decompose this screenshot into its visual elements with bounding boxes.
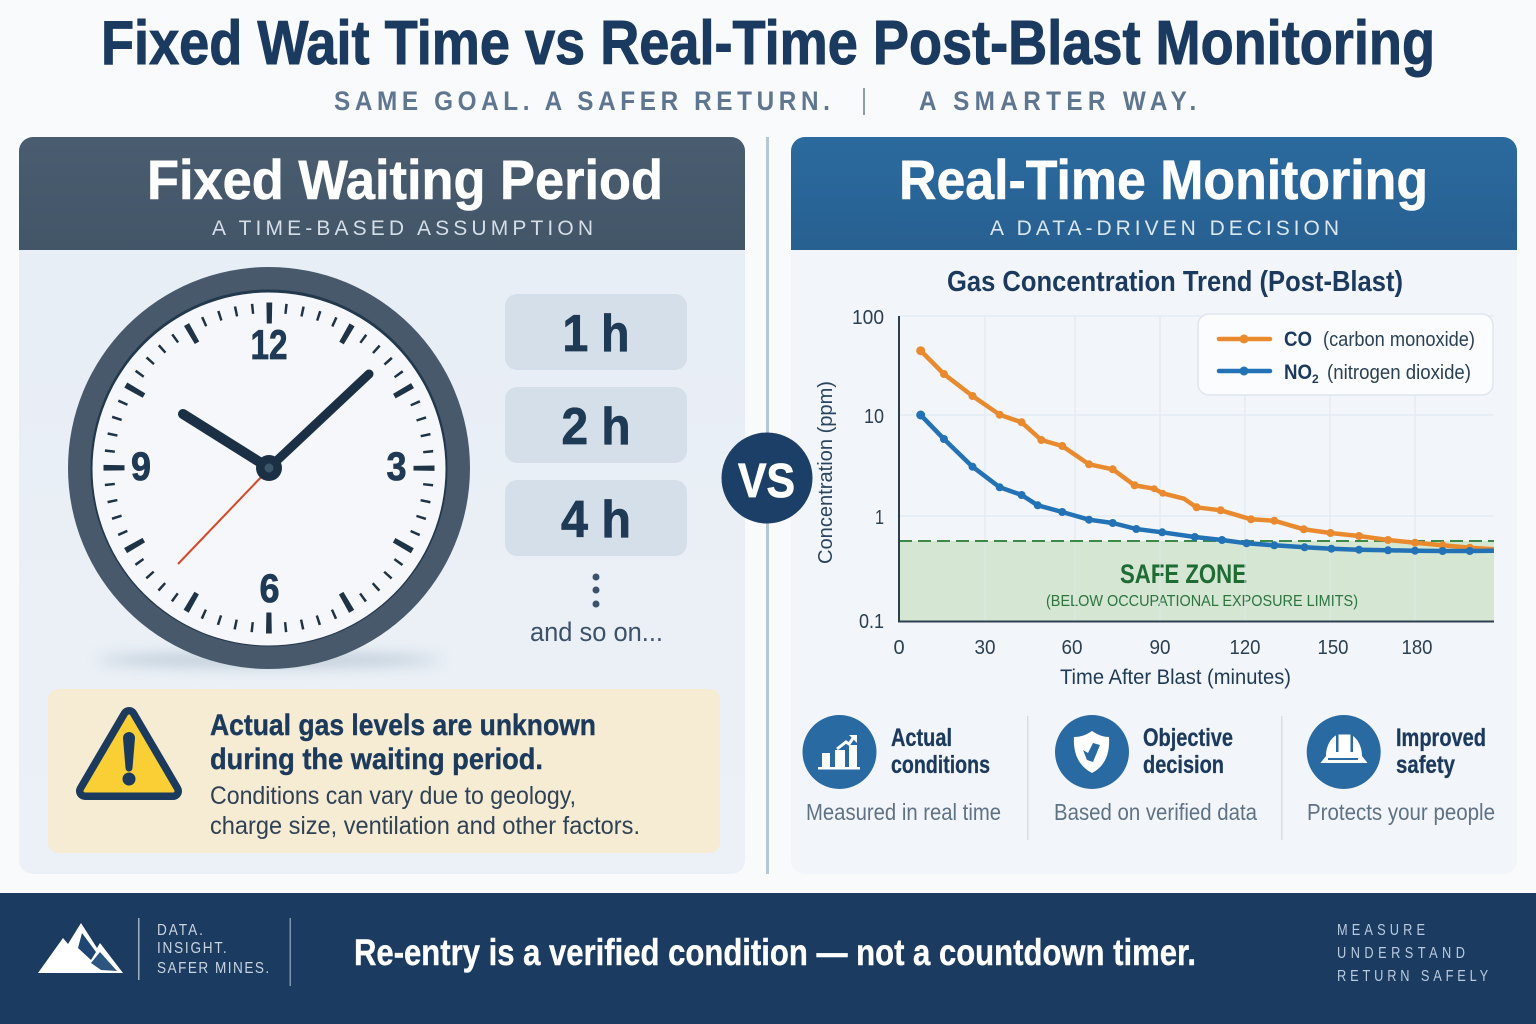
x axis labels: 150 <box>1318 637 1348 659</box>
subtitle <box>334 87 1196 116</box>
y axis labels: 10 <box>864 406 884 428</box>
series: NO2 <box>916 410 1494 555</box>
series: CO <box>916 346 1494 552</box>
footer banner <box>0 893 1536 1024</box>
benefit: objective decision <box>1054 715 1257 825</box>
axes <box>899 316 1494 622</box>
icon: warning triangle <box>85 716 173 791</box>
time option: 1 h: 1 h <box>562 305 630 363</box>
panel header: real-time monitoring: Real-Time Monitoring <box>899 148 1428 211</box>
continuation dots and caption: and so on... <box>530 617 663 647</box>
legend <box>1198 314 1493 395</box>
legend: (nitrogen dioxide) <box>1327 362 1471 384</box>
footer steps: MEASURE <box>1337 922 1425 939</box>
time option: 4 h: 4 h <box>561 491 631 549</box>
icon: clock <box>68 267 470 669</box>
divider between panels <box>766 137 769 874</box>
x axis labels: 180 <box>1402 637 1432 659</box>
safe zone: SAFE ZONE <box>1120 559 1247 589</box>
benefit: improved safety <box>1307 715 1495 825</box>
panel header: fixed waiting period <box>19 137 745 250</box>
panel header: fixed waiting period: A TIME-BASED ASSUMPTION <box>212 217 593 240</box>
panel: real-time monitoring <box>791 137 1517 874</box>
y axis labels: 0.1 <box>859 611 884 633</box>
x axis labels: 90 <box>1150 637 1170 659</box>
legend: CO <box>1284 328 1312 351</box>
y axis labels <box>852 307 884 633</box>
footer tagline: SAFER MINES. <box>157 960 269 977</box>
callout: unknown gas levels: charge size, ventilation and other factors. <box>210 812 640 840</box>
x axis labels: 0 <box>893 637 905 659</box>
chart heading: Gas Concentration Trend (Post-Blast) <box>947 266 1403 298</box>
legend: 2 <box>1312 372 1319 386</box>
footer steps: UNDERSTAND <box>1337 945 1465 962</box>
icon: clock: 6 <box>260 567 280 611</box>
logo: mountains <box>38 923 123 973</box>
time option: 2 h <box>505 387 687 463</box>
y axis labels: 100 <box>852 307 884 329</box>
benefit: actual conditions: Measured in real time <box>806 799 1001 825</box>
benefit: actual conditions: Actual <box>891 724 952 752</box>
y axis labels: 1 <box>875 507 884 529</box>
divider <box>1281 716 1282 840</box>
safe zone <box>899 541 1494 621</box>
icon: clock: 9 <box>131 445 151 489</box>
divider <box>1027 716 1028 840</box>
x axis labels <box>893 637 1432 659</box>
icon: clock: 12 <box>250 321 288 368</box>
benefit: objective decision: Based on verified data <box>1054 799 1257 825</box>
benefit: actual conditions <box>802 715 1001 825</box>
continuation dots and caption <box>530 574 663 647</box>
footer steps: RETURN SAFELY <box>1337 968 1489 985</box>
x axis labels: 60 <box>1062 637 1082 659</box>
benefit: objective decision: Objective <box>1143 724 1233 752</box>
VS badge: VS <box>738 455 795 508</box>
x axis title: Time After Blast (minutes) <box>1060 666 1291 689</box>
subtitle: A SMARTER WAY. <box>919 87 1196 116</box>
icon: rising bar chart <box>802 715 876 789</box>
panel header: fixed waiting period: Fixed Waiting Period <box>147 148 663 211</box>
line chart: gas concentration <box>815 307 1494 689</box>
icon: clock: 3 <box>386 445 406 489</box>
subtitle: SAME GOAL. A SAFER RETURN. <box>334 87 830 116</box>
benefit: objective decision: decision <box>1143 751 1224 779</box>
x axis labels: 30 <box>974 637 996 659</box>
callout: unknown gas levels: Actual gas levels are unknown <box>210 709 596 742</box>
benefit: actual conditions: conditions <box>891 751 990 779</box>
footer tagline: INSIGHT. <box>157 940 227 957</box>
time option: 2 h: 2 h <box>562 398 630 456</box>
y axis title: Concentration (ppm) <box>815 381 837 564</box>
panel: fixed waiting period <box>19 137 745 874</box>
panel header: real-time monitoring <box>791 137 1517 250</box>
footer tagline: DATA. <box>157 922 203 939</box>
time option: 4 h <box>505 480 687 556</box>
benefit: improved safety: Protects your people <box>1307 799 1495 825</box>
footer tagline <box>157 922 269 977</box>
callout: unknown gas levels <box>48 689 720 853</box>
legend: (carbon monoxide) <box>1323 329 1475 351</box>
icon: hard hat <box>1307 715 1381 789</box>
time option: 1 h <box>505 294 687 370</box>
safe zone: (BELOW OCCUPATIONAL EXPOSURE LIMITS) <box>1046 593 1358 610</box>
benefit: improved safety: Improved <box>1396 724 1486 752</box>
VS badge <box>722 432 812 524</box>
icon: shield with check <box>1055 715 1129 789</box>
footer steps <box>1337 922 1489 985</box>
callout: unknown gas levels: during the waiting period. <box>210 743 543 776</box>
panel header: real-time monitoring: A DATA-DRIVEN DECISION <box>990 217 1339 240</box>
callout: unknown gas levels: Conditions can vary due to geology, <box>210 782 576 810</box>
legend: NO <box>1284 361 1312 384</box>
benefit: improved safety: safety <box>1396 751 1455 779</box>
x axis labels: 120 <box>1230 637 1260 659</box>
footer message: Re-entry is a verified condition — not a countdown timer. <box>354 932 1196 973</box>
